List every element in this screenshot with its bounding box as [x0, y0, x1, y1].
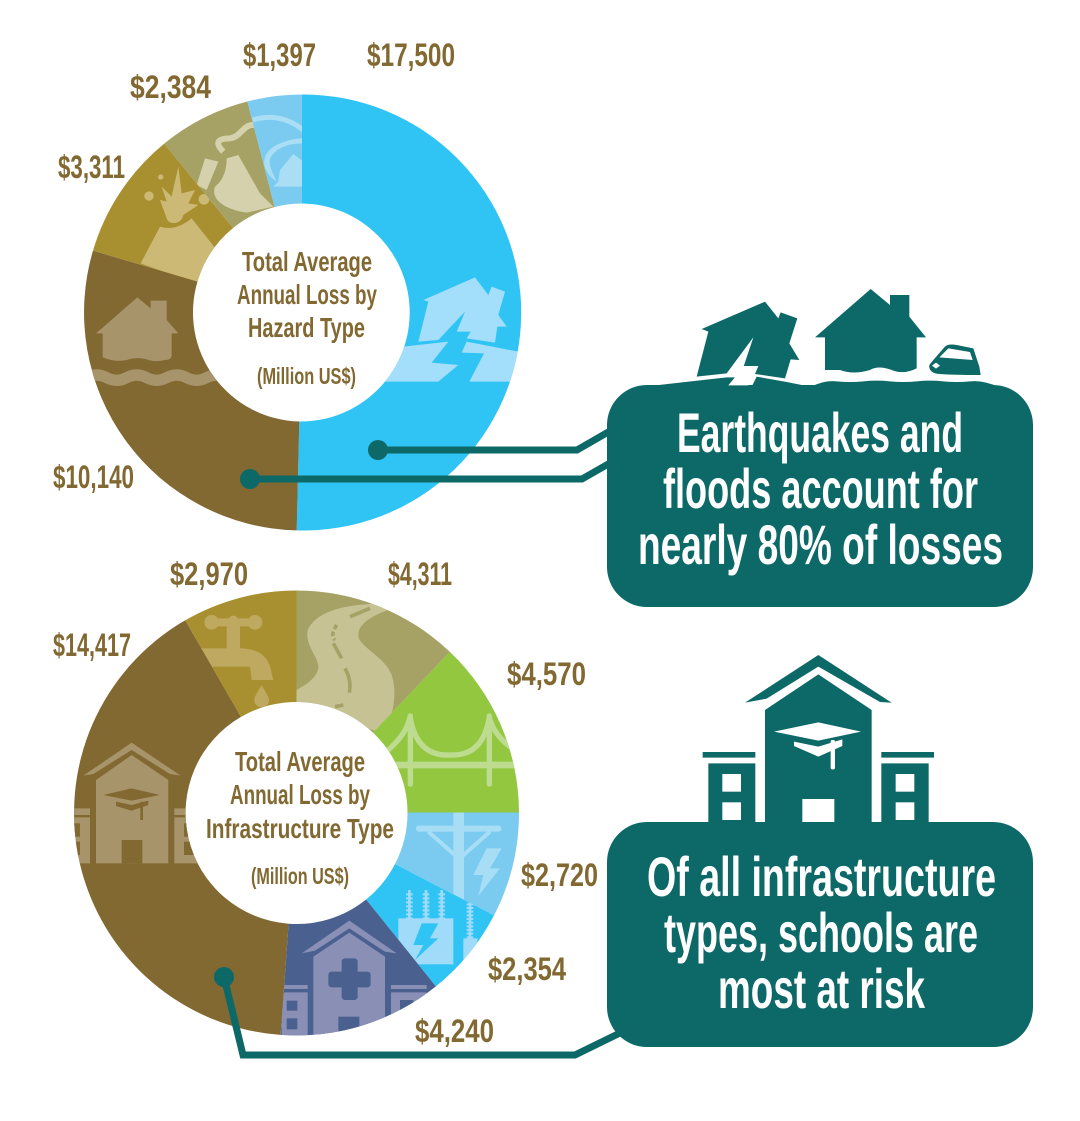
- segment: flood: [84, 251, 299, 530]
- callout: earthquakes and floods: [607, 289, 1033, 607]
- segment: volcanic ash: [164, 102, 275, 228]
- segment: bridges: [373, 652, 520, 812]
- segment: water: [185, 590, 296, 717]
- donut chart: loss by infrastructure type: [73, 590, 520, 1040]
- value labels: hazard chart: $3,311: [58, 149, 125, 185]
- centre title: (Million US$): [257, 363, 356, 389]
- centre title: Infrastructure Type: [206, 813, 394, 844]
- connector: earthquake to callout: [368, 431, 610, 460]
- value labels: infrastructure chart: $4,570: [507, 656, 586, 692]
- value labels: hazard chart: $1,397: [243, 37, 316, 73]
- value labels: hazard chart: [53, 37, 455, 495]
- panel background: [607, 822, 1033, 1047]
- callout text: most at risk: [718, 957, 926, 1020]
- value labels: hazard chart: $17,500: [367, 37, 455, 73]
- segment: power lines: [395, 812, 519, 915]
- connector: flood to callout: [240, 463, 610, 489]
- callout text: [638, 401, 1003, 576]
- centre title: (Million US$): [251, 863, 349, 889]
- donut chart: loss by hazard type: [84, 94, 521, 530]
- callout text: [647, 845, 996, 1020]
- segment: earthquake: [297, 94, 521, 530]
- value labels: infrastructure chart: $4,240: [415, 1013, 494, 1049]
- value labels: infrastructure chart: $2,720: [521, 857, 598, 893]
- segment: schools: [73, 620, 289, 1035]
- value labels: infrastructure chart: [53, 556, 598, 1049]
- panel background: [607, 385, 1033, 607]
- connector: schools to callout: [214, 967, 622, 1055]
- centre title: Annual Loss by: [237, 279, 377, 310]
- segment: hospitals: [281, 900, 436, 1040]
- centre title: [237, 246, 377, 389]
- value labels: infrastructure chart: $4,311: [388, 556, 452, 592]
- icon: cracked ground and flood water: [650, 337, 1000, 387]
- centre title: [206, 746, 394, 889]
- segment: tsunami: [247, 94, 303, 207]
- centre title: Hazard Type: [248, 312, 365, 343]
- value labels: infrastructure chart: $14,417: [53, 627, 131, 663]
- icon: school building: [703, 655, 934, 823]
- callout: schools most at risk: [607, 655, 1033, 1047]
- icon: collapsed house, flooded house and car: [697, 289, 981, 378]
- value labels: hazard chart: $10,140: [53, 459, 134, 495]
- segment: roads: [293, 590, 450, 733]
- value labels: infrastructure chart: $2,970: [170, 556, 248, 592]
- value labels: infrastructure chart: $2,354: [488, 951, 566, 987]
- value labels: hazard chart: $2,384: [130, 69, 211, 105]
- centre title: Total Average: [235, 746, 365, 777]
- segment: substations: [366, 864, 494, 986]
- centre title: Total Average: [242, 246, 372, 277]
- centre title: Annual Loss by: [230, 779, 370, 810]
- segment: volcanic eruption: [93, 144, 233, 283]
